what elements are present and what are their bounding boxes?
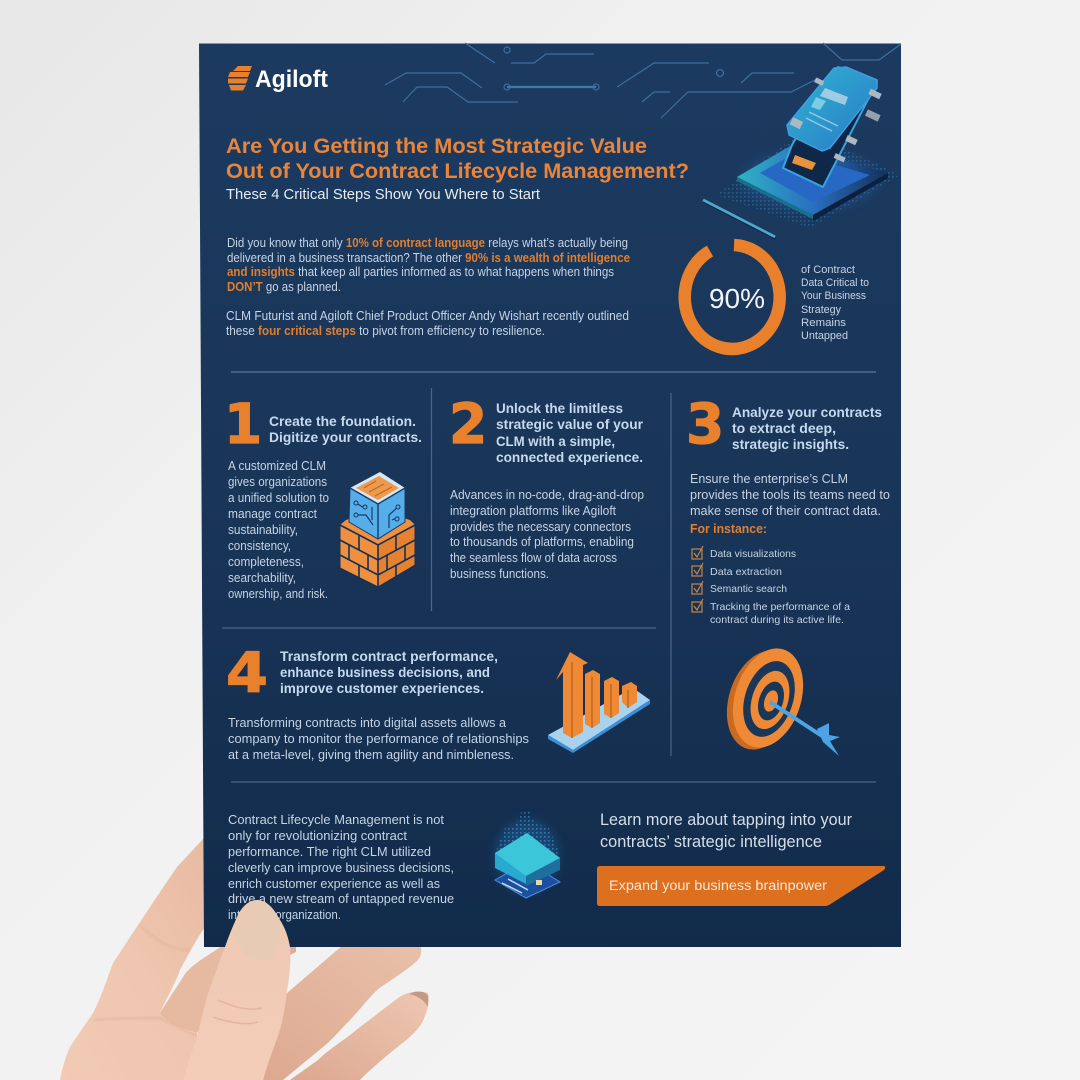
body step 1: a unified solution to <box>228 491 329 505</box>
closing paragraph: enrich customer experience as well as <box>228 876 440 891</box>
body step 2 <box>450 488 644 581</box>
body step 1: ownership, and risk. <box>228 587 328 601</box>
body step 3 <box>690 472 890 518</box>
icon: glowing data cube <box>495 810 560 898</box>
heading step 2 <box>496 401 644 465</box>
donut caption: Strategy <box>801 304 841 316</box>
body step 1: consistency, <box>228 539 291 553</box>
heading step 2: strategic value of your <box>496 417 644 432</box>
intro paragraph <box>226 236 630 338</box>
number 4: 4 <box>226 641 268 705</box>
closing paragraph <box>228 812 454 922</box>
illustration: phone on platform <box>703 67 900 239</box>
donut caption <box>801 264 869 342</box>
body step 4: company to monitor the performance of relationships <box>228 731 529 746</box>
donut caption: of Contract <box>801 264 855 276</box>
body step 3: make sense of their contract data. <box>690 504 881 518</box>
icon: logo stripes <box>228 66 252 90</box>
intro paragraph: DON’T go as planned. <box>227 280 341 294</box>
title <box>226 135 689 183</box>
donut chart 90%: 90% <box>709 283 765 314</box>
body step 1: completeness, <box>228 555 304 569</box>
body step 1 <box>228 459 329 601</box>
intro paragraph: these four critical steps to pivot from efficiency to resilience. <box>226 324 545 338</box>
intro paragraph: delivered in a business transaction? The other 90% is a wealth of intelligence <box>227 251 630 265</box>
heading step 4: Transform contract performance, <box>280 649 498 664</box>
heading step 4: improve customer experiences. <box>280 681 484 696</box>
heading step 1 <box>269 414 422 445</box>
panel: step 2 <box>449 392 644 581</box>
donut caption: Untapped <box>801 330 848 342</box>
heading step 3: strategic insights. <box>732 437 849 452</box>
checklist: contract during its active life. <box>710 614 844 626</box>
checklist: Data visualizations <box>710 548 796 560</box>
closing paragraph: performance. The right CLM utilized <box>228 844 431 859</box>
icon: target and arrow <box>715 639 840 759</box>
body step 2: the seamless flow of data across <box>450 551 617 565</box>
icon: brick wall and digital cube <box>340 472 415 587</box>
heading step 1: Create the foundation. <box>269 414 416 429</box>
body step 3: Ensure the enterprise’s CLM <box>690 472 848 486</box>
panel: step 1 <box>224 392 422 601</box>
body step 1: manage contract <box>228 507 318 521</box>
heading step 2: Unlock the limitless <box>496 401 623 416</box>
heading step 3 <box>732 405 882 452</box>
body step 2: Advances in no-code, drag-and-drop <box>450 488 644 502</box>
donut caption: Your Business <box>801 290 866 302</box>
body step 1: A customized CLM <box>228 459 326 473</box>
title: Are You Getting the Most Strategic Value <box>226 135 647 158</box>
body step 4: Transforming contracts into digital assets allows a <box>228 715 507 730</box>
closing paragraph: Contract Lifecycle Management is not <box>228 812 444 827</box>
intro paragraph: CLM Futurist and Agiloft Chief Product Officer Andy Wishart recently outlined <box>226 309 629 323</box>
body step 1: sustainability, <box>228 523 298 537</box>
icon: bar chart with arrow <box>548 652 650 753</box>
circuit lines decoration <box>385 43 901 118</box>
body step 1: searchability, <box>228 571 296 585</box>
number 3: 3 <box>686 392 724 456</box>
hand behind card <box>60 838 429 1080</box>
panel: step 4 <box>226 641 650 762</box>
number 1: 1 <box>224 392 262 456</box>
body step 1: gives organizations <box>228 475 327 489</box>
body step 2: to thousands of platforms, enabling <box>450 535 634 549</box>
body step 2: integration platforms like Agiloft <box>450 504 616 518</box>
button: Expand your business brainpower <box>609 877 827 893</box>
checklist: Tracking the performance of a <box>710 601 850 613</box>
body step 2: provides the necessary connectors <box>450 520 631 534</box>
button <box>597 866 885 906</box>
call to action text: Learn more about tapping into your <box>600 811 852 829</box>
heading step 1: Digitize your contracts. <box>269 430 422 445</box>
panel: step 3 <box>686 392 890 759</box>
heading step 2: connected experience. <box>496 450 643 465</box>
subtitle: These 4 Critical Steps Show You Where to Start <box>226 187 540 203</box>
number 2: 2 <box>449 392 487 456</box>
body step 3: provides the tools its teams need to <box>690 488 890 502</box>
title: Out of Your Contract Lifecycle Management? <box>226 160 689 183</box>
logo: Agiloft <box>255 66 328 93</box>
donut caption: Remains <box>801 317 847 329</box>
body step 4: at a meta-level, giving them agility and nimbleness. <box>228 747 514 762</box>
closing paragraph: drive a new stream of untapped revenue <box>228 891 454 906</box>
closing paragraph: only for revolutionizing contract <box>228 828 407 843</box>
checklist: Semantic search <box>710 583 787 595</box>
for instance label: For instance: <box>690 521 767 536</box>
card <box>199 43 901 947</box>
body step 4 <box>228 715 529 762</box>
donut chart 90% <box>685 245 780 349</box>
checklist <box>692 546 850 626</box>
heading step 3: to extract deep, <box>732 421 836 436</box>
intro paragraph: Did you know that only 10% of contract language relays what’s actually being <box>227 236 628 250</box>
call to action text: contracts’ strategic intelligence <box>600 833 822 851</box>
closing paragraph: cleverly can improve business decisions, <box>228 860 454 875</box>
heading step 4 <box>280 649 498 696</box>
front finger with nail <box>183 900 290 1080</box>
closing paragraph: into your organization. <box>228 907 341 922</box>
heading step 3: Analyze your contracts <box>732 405 882 420</box>
checklist: Data extraction <box>710 566 782 578</box>
donut caption: Data Critical to <box>801 277 869 289</box>
heading step 2: CLM with a simple, <box>496 434 615 449</box>
body step 2: business functions. <box>450 567 549 581</box>
call to action text <box>600 811 852 851</box>
intro paragraph: and insights that keep all parties informed as to what happens when things <box>227 265 614 279</box>
heading step 4: enhance business decisions, and <box>280 665 490 680</box>
